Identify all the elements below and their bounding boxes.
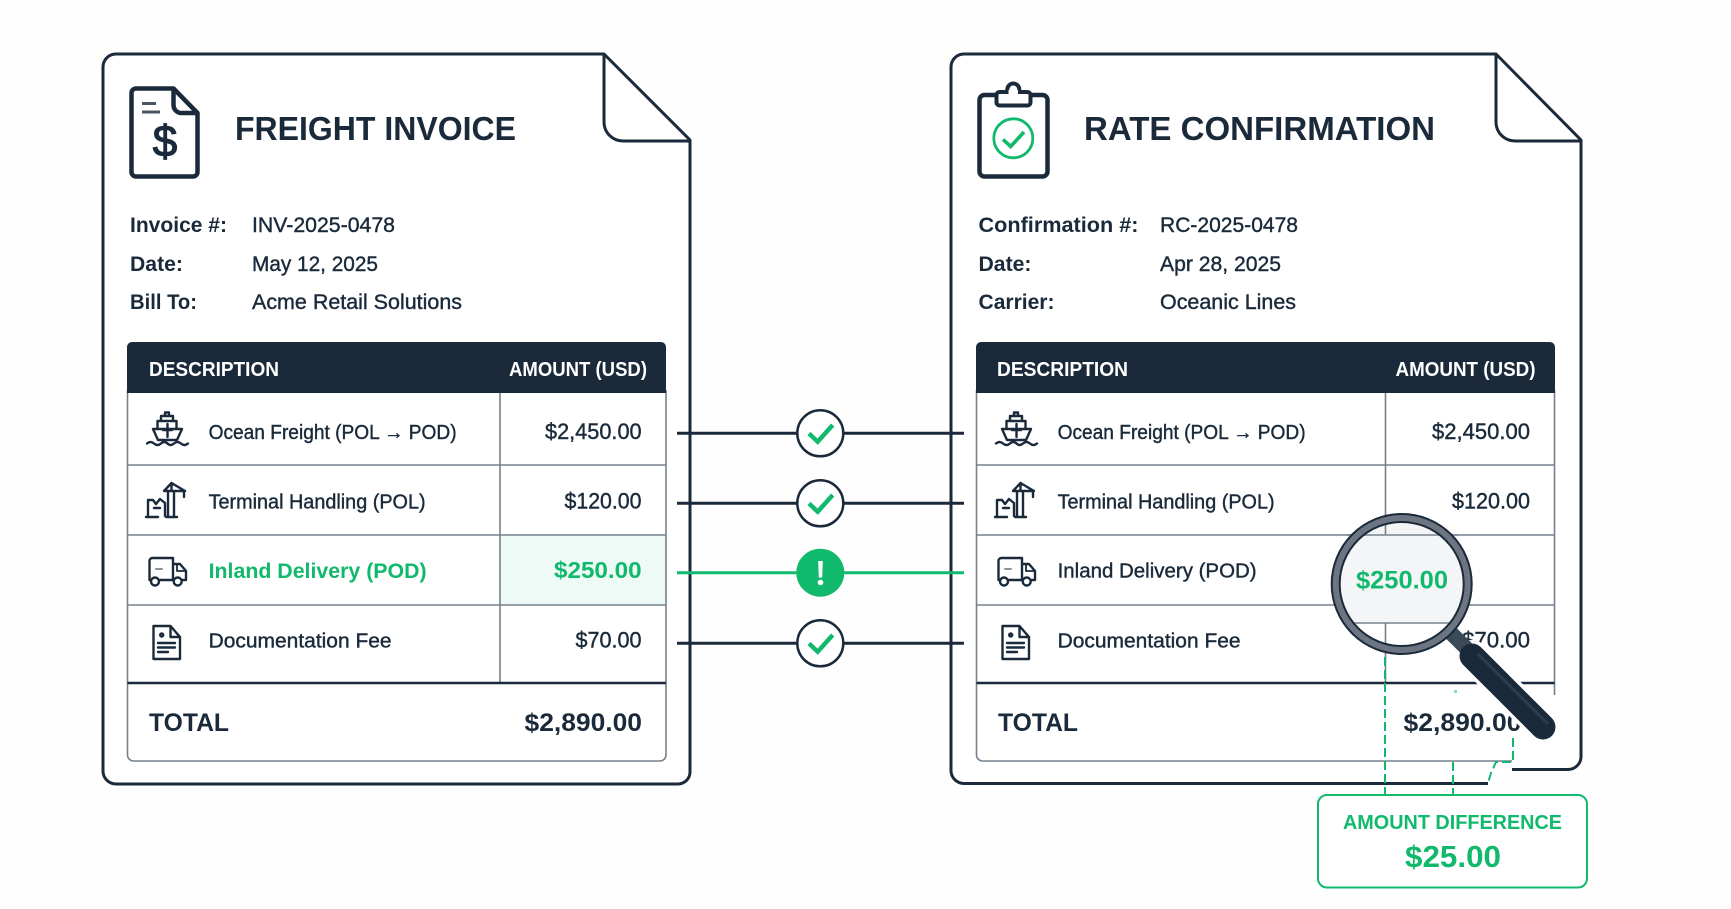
table grid [976,390,1554,761]
connector: terminal handling matched [677,480,964,526]
magnified amount: $250.00 [1356,566,1448,594]
dashed leader lines to amount difference [1385,657,1513,795]
table: invoice charges: $2,890.00 [524,709,642,737]
connector: documentation fee matched [677,620,964,666]
lens [1340,522,1464,646]
table: confirmed rates: AMOUNT (USD) [1396,359,1536,381]
table: confirmed rates: $2,890.00 [1404,709,1522,737]
table: confirmed rates: $2,450.00 [1432,419,1530,444]
table: confirmed rates: $70.00 [1462,628,1530,652]
table: invoice charges: AMOUNT (USD) [509,359,647,381]
table: invoice charges: $70.00 [576,628,642,652]
handle grip [1472,656,1543,727]
table: invoice charges: $250.00 [554,557,642,583]
handle knockout [1472,656,1543,727]
document outline with folded corner [103,54,690,784]
table: confirmed rates [976,342,1555,761]
invoice metadata: Invoice #: [130,214,227,237]
callout: amount difference: AMOUNT DIFFERENCE [1343,812,1562,834]
panel: freight invoice document [103,54,690,784]
icon: ship [996,412,1037,445]
icon: ship [147,412,188,445]
invoice metadata: Bill To: [130,291,197,314]
handle neck [1451,633,1474,656]
highlighted amount cell [500,535,666,605]
callout: amount difference: $25.00 [1405,839,1501,874]
table: invoice charges: $2,450.00 [545,419,642,444]
row: terminal handling: Terminal Handling (POL) [1058,492,1275,514]
table: invoice charges [127,342,666,761]
row: documentation fee: Documentation Fee [1058,630,1241,652]
icon: document [1002,626,1029,659]
icon: clipboard with check [980,84,1048,176]
icon: delivery truck [150,558,186,586]
icon: invoice file with dollar sign: $ [153,117,177,166]
page fold [604,54,690,141]
table grid [128,390,666,761]
invoice metadata: Acme Retail Solutions [252,291,462,314]
row: ocean freight: Ocean Freight (POL → POD) [1058,422,1306,444]
table: invoice charges: DESCRIPTION [149,359,279,381]
row: terminal handling: Terminal Handling (POL) [209,492,426,514]
confirmation metadata: Apr 28, 2025 [1160,253,1281,276]
panel: rate confirmation document [951,54,1581,784]
icon: magnifying glass over inland delivery amount [1336,518,1548,727]
icon: document [154,626,180,659]
page fold [1496,54,1581,141]
row: inland delivery, flagged: Inland Delivery (POD) [209,560,427,583]
table: invoice charges: $120.00 [564,488,642,514]
confirmation metadata: Carrier: [978,291,1054,314]
icon: terminal crane [995,483,1034,517]
icon: delivery truck [998,558,1035,586]
row: total: TOTAL [149,709,229,737]
confirmation metadata: RC-2025-0478 [1160,214,1298,237]
row: inland delivery: Inland Delivery (POD) [1058,560,1257,582]
icon: invoice file with dollar sign [132,88,198,176]
heading: rate confirmation: RATE CONFIRMATION [1084,111,1435,148]
table: confirmed rates: DESCRIPTION [997,359,1128,381]
heading: freight invoice: FREIGHT INVOICE [235,111,516,148]
row: documentation fee: Documentation Fee [209,630,392,652]
connectors: line item match status [677,410,964,666]
row: ocean freight: Ocean Freight (POL → POD) [209,422,457,444]
ring [1336,518,1468,650]
confirmation metadata: Date: [978,253,1032,276]
table header [976,342,1555,393]
confirmation metadata: Oceanic Lines [1160,291,1296,314]
document outline with folded corner and torn bottom [951,54,1581,784]
connector: inland delivery mismatch [677,549,964,597]
invoice metadata: INV-2025-0478 [252,214,395,237]
table header [127,342,666,393]
callout: amount difference [1318,795,1587,888]
confirmation metadata: Confirmation #: [978,214,1138,237]
invoice metadata: May 12, 2025 [252,253,378,276]
icon: terminal crane [146,483,185,517]
confirmation metadata [978,214,1298,314]
row: total: TOTAL [998,709,1078,737]
table: confirmed rates: $120.00 [1452,488,1530,514]
connector: ocean freight matched [677,410,964,456]
invoice metadata: Date: [130,253,183,276]
invoice metadata [130,214,462,314]
